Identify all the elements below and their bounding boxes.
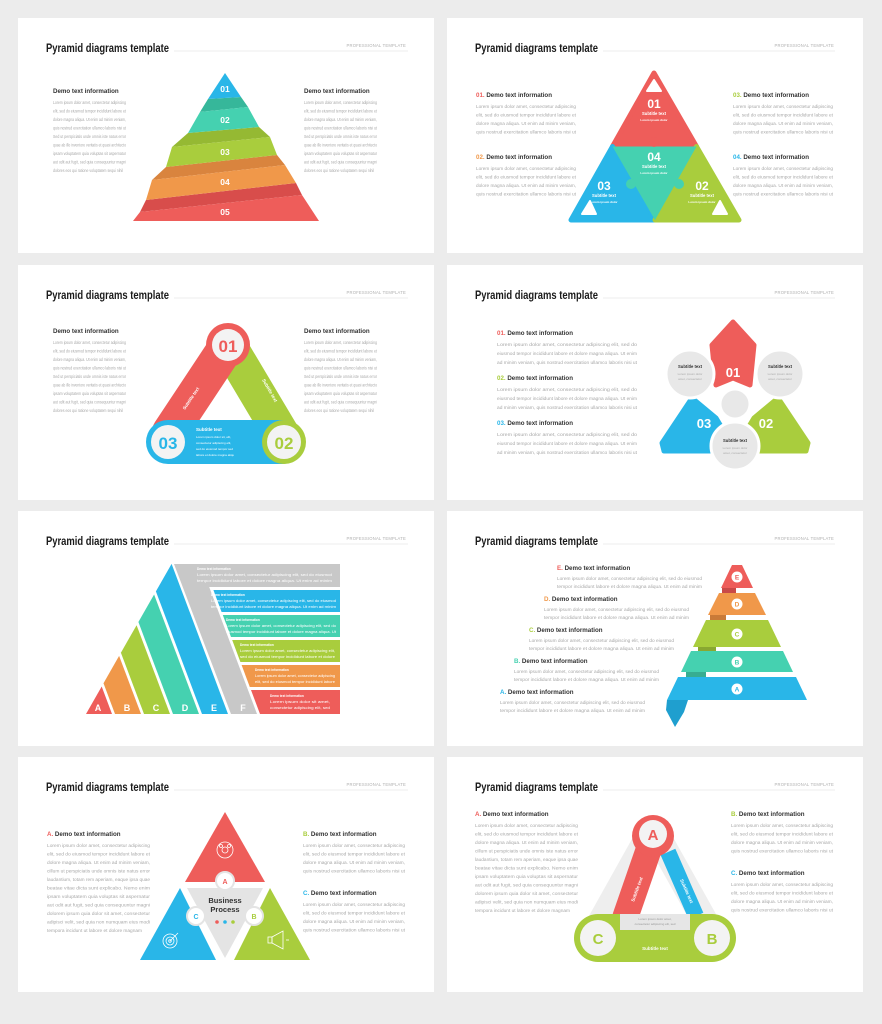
text block: A: aut odit aut fugit, sed quia consequuntur magni xyxy=(47,902,150,908)
text block: right: aut odit aut fugit, sed quia consequuntur magni xyxy=(304,400,377,404)
panel: slide 4 arrow flower xyxy=(447,265,863,500)
text block: left xyxy=(53,328,127,413)
text block: 03: dolore magna aliqua. Ut enim ad minim veniam, xyxy=(733,121,833,126)
chart: arrow flower: 01 xyxy=(726,365,740,380)
text block: D: D. Demo text information xyxy=(544,596,618,603)
chart: striped pyramid: Demo text information xyxy=(197,567,231,571)
chart: business process triangle: Process xyxy=(210,905,240,914)
chart: puzzle triangle: Subtitle text xyxy=(690,193,715,198)
chart: puzzle triangle: Lorem ipsum dolor xyxy=(640,171,668,175)
text block: B: dolore magna aliqua. Ut enim ad minim veniam, xyxy=(303,860,405,865)
text block: A: beatae vitae dicta sunt explicabo. Nemo enim xyxy=(475,866,578,870)
text block: E: tempor incididunt labore et dolore magna aliqua. Ut enim ad minim xyxy=(557,584,702,589)
text block: left: ipsam voluptatem quia voluptas sit aspernatur xyxy=(53,151,126,156)
chart: striped pyramid: B xyxy=(124,703,131,713)
text block: left: dolore magna aliqua. Ut enim ad minim veniam, xyxy=(53,117,126,122)
chart: arrow flower: amet, consectetur xyxy=(768,377,792,381)
text block: A: dolorem ipsum quia dolor sit amet, consectetur xyxy=(475,891,579,896)
title: slide 1: PROFESSIONAL TEMPLATE xyxy=(346,43,406,48)
chart: striped pyramid: Lorem ipsum dolor sit amet, xyxy=(270,700,330,704)
text block: right: dolore magna aliqua. Ut enim ad minim veniam, xyxy=(304,357,377,362)
text block: left: quae ab illo inventore veritatis et quasi architecto xyxy=(53,382,126,388)
text block: A: A. Demo text information xyxy=(500,689,574,696)
panel: slide 5 striped pyramid xyxy=(18,511,434,746)
chart: layered pyramid: D xyxy=(735,602,740,608)
text block: C: C. Demo text information xyxy=(731,870,805,877)
text block: B: quis nostrud exercitation ullamco laboris nisi ut xyxy=(303,868,406,874)
chart: ribbon triangle: Subtitle text xyxy=(182,386,201,411)
chart: arrow flower: Subtitle text xyxy=(723,438,748,443)
chart: ring triangle: Subtitle text xyxy=(642,946,668,951)
text block: 03: 03. Demo text information xyxy=(497,420,573,427)
text block: 04: quis nostrud exercitation ullamco laboris nisi ut xyxy=(733,192,834,196)
text block: right: aut odit aut fugit, sed quia consequuntur magni xyxy=(304,160,377,164)
title: slide 3: PROFESSIONAL TEMPLATE xyxy=(346,290,406,295)
text block: A: tempora incidunt ut labore et dolore magnam xyxy=(47,928,142,933)
text block: A: A. Demo text information xyxy=(475,811,549,818)
text block: A: tempora incidunt ut labore et dolore magnam xyxy=(475,908,570,913)
text block: B: B. Demo text information xyxy=(731,811,805,818)
chart: striped pyramid: sed do eiusmod tempor incididunt labore et dolore xyxy=(240,655,335,659)
text block: right: dolores eos qui ratione voluptatem sequi nihil xyxy=(304,408,374,413)
title: slide 5: PROFESSIONAL TEMPLATE xyxy=(346,536,406,541)
text block: 02: elit, sed do eiusmod tempor incididunt labore et xyxy=(476,174,577,180)
text block: left: ipsam voluptatem quia voluptas sit aspernatur xyxy=(53,391,126,396)
text block: 04: 04. Demo text information xyxy=(733,154,809,161)
text block: E xyxy=(557,565,703,589)
chart: striped pyramid: Lorem ipsum dolor amet, consectetur adipiscing elit, sed do eiusmod xyxy=(197,573,332,577)
text block: 02: ad minim veniam, quis nostrud exercitation ullamco laboris nisi ut xyxy=(497,405,638,410)
chart: arrow flower: amet, consectetur xyxy=(678,377,702,381)
text block: A: Lorem ipsum dolor amet, consectetur adipiscing elit, sed do eiusmod xyxy=(500,700,646,705)
chart: puzzle triangle xyxy=(571,73,739,220)
text block: B xyxy=(514,658,660,682)
text block: 02: 02. Demo text information xyxy=(476,154,552,161)
chart: striped pyramid xyxy=(86,564,340,714)
chart: ring triangle: Lorem ipsum dolor amet, xyxy=(638,917,672,921)
text block: right xyxy=(304,328,378,413)
text block: E: Lorem ipsum dolor amet, consectetur adipiscing elit, sed do eiusmod xyxy=(557,576,703,581)
text block: 04: dolore magna aliqua. Ut enim ad minim veniam, xyxy=(733,183,833,188)
text block: right: quis nostrud exercitation ullamco laboris nisi ut xyxy=(304,126,378,130)
text block: A: beatae vitae dicta sunt explicabo. Nemo enim xyxy=(47,886,150,890)
chart: ring triangle: C xyxy=(593,931,604,948)
chart: layered pyramid: A xyxy=(735,686,740,694)
text block: C: Lorem ipsum dolor amet, consectetur adipiscing xyxy=(303,902,406,907)
chart: ring triangle: Subtitle text xyxy=(679,878,694,904)
chart: puzzle triangle: Lorem ipsum dolor xyxy=(688,200,716,204)
text block: right: Lorem ipsum dolor amet, consectetur adipiscing xyxy=(304,100,377,105)
title: slide 1 xyxy=(46,43,408,55)
icon: target xyxy=(163,933,178,948)
chart: striped pyramid: Lorem ipsum dolor amet, consectetur adipiscing elit, sed do xyxy=(226,624,336,628)
text block: 01: eiusmod tempor incididunt labore et dolore magna aliqua. Ut enim xyxy=(497,351,637,356)
chart: arrow flower: Lorem ipsum dolor xyxy=(723,446,747,450)
text block: left: Sed ut perspiciatis unde omnis iste natus error xyxy=(53,374,126,379)
title: slide 5 xyxy=(46,536,408,548)
text block: right: dolore magna aliqua. Ut enim ad minim veniam, xyxy=(304,117,377,122)
chart: arrow flower: 02 xyxy=(759,416,773,431)
chart: ring triangle: Subtitle text xyxy=(630,876,644,902)
chart: ring triangle: B xyxy=(707,931,718,948)
chart: arrow flower xyxy=(662,322,808,470)
chart: ring triangle: consectetur adipiscing elit, sed xyxy=(635,922,676,926)
text block: A: A. Demo text information xyxy=(47,831,121,838)
chart: striped pyramid: A xyxy=(95,703,102,713)
title: slide 8: PROFESSIONAL TEMPLATE xyxy=(774,782,834,787)
chart: arrow flower: amet, consectetur xyxy=(723,451,747,455)
text block: left: quis nostrud exercitation ullamco laboris nisi ut xyxy=(53,126,127,130)
chart: business process triangle: C xyxy=(193,914,199,921)
title: slide 8: Pyramid diagrams template xyxy=(475,782,598,794)
text block: A: elit, sed do eiusmod tempor incididunt labore et xyxy=(47,852,151,856)
chart: puzzle triangle: Subtitle text xyxy=(592,193,617,198)
text block: right: ipsam voluptatem quia voluptas sit aspernatur xyxy=(304,151,377,156)
text block: C: elit, sed do eiusmod tempor incididunt labore et xyxy=(731,890,834,896)
chart: ribbon triangle: labore et dolore magna aliqu xyxy=(196,453,234,457)
text block: A: dolorem ipsum quia dolor sit amet, consectetur xyxy=(47,911,151,916)
chart: spiral pyramid: 02 xyxy=(220,115,230,125)
text block: 03: Lorem ipsum dolor amet, consectetur adipiscing elit, sed do xyxy=(497,432,638,437)
text block: 01: Lorem ipsum dolor amet, consectetur adipiscing elit, sed do xyxy=(497,342,638,347)
chart: layered pyramid: E xyxy=(735,574,740,582)
text block: 04: Lorem ipsum dolor amet, consectetur adipiscing xyxy=(733,166,834,171)
chart: striped pyramid: C xyxy=(153,703,160,713)
text block: B: elit, sed do eiusmod tempor incididunt labore et xyxy=(731,832,834,836)
text block: 03: Lorem ipsum dolor amet, consectetur adipiscing xyxy=(733,104,834,109)
text block: A: cillum ut perspiciatis unde omnis iste natus error xyxy=(475,848,579,854)
chart: ribbon triangle: 01 xyxy=(219,337,237,356)
text block: right: ipsam voluptatem quia voluptas sit aspernatur xyxy=(304,391,377,396)
chart: striped pyramid: F xyxy=(240,703,246,713)
panel: slide 6 layered pyramid xyxy=(447,511,863,746)
title: slide 4 xyxy=(475,290,835,302)
chart: puzzle triangle: 01 xyxy=(647,97,661,111)
text block: C: dolore magna aliqua. Ut enim ad minim veniam, xyxy=(731,899,833,904)
text block: 02: 02. Demo text information xyxy=(497,375,573,382)
text block: left: Lorem ipsum dolor amet, consectetur adipiscing xyxy=(53,340,126,345)
chart: striped pyramid: tempor incididunt labore et dolore magna aliqua. Ut enim ad minim xyxy=(211,605,336,609)
chart: layered pyramid: C xyxy=(735,632,740,638)
text block: A: laudantium, totam rem aperiam, eaque ipsa quae xyxy=(47,877,151,882)
title: slide 7: PROFESSIONAL TEMPLATE xyxy=(346,782,406,787)
text block: A: laudantium, totam rem aperiam, eaque ipsa quae xyxy=(475,857,579,862)
panel: slide 8 ring triangle xyxy=(447,757,863,992)
chart: business process triangle: B xyxy=(251,914,257,921)
chart: ribbon triangle: 02 xyxy=(275,434,293,453)
text block: A: cillum ut perspiciatis unde omnis iste natus error xyxy=(47,868,151,874)
text block: D: Lorem ipsum dolor amet, consectetur adipiscing elit, sed do eiusmod xyxy=(544,607,690,612)
chart: striped pyramid: tempor incididunt labore et dolore magna aliqua. Ut enim ad minim xyxy=(197,579,332,583)
text block: right: Demo text information xyxy=(304,328,370,335)
text block: right: quis nostrud exercitation ullamco laboris nisi ut xyxy=(304,366,378,370)
text block: C: C. Demo text information xyxy=(303,890,377,897)
text block: B xyxy=(731,811,834,854)
panel: slide 3 ribbon triangle xyxy=(18,265,434,500)
text block: A: adipisci velit, sed quia non numquam eius modi xyxy=(47,920,150,924)
chart: ribbon triangle: consectetur adipiscing elit, xyxy=(196,441,231,445)
text block: E: E. Demo text information xyxy=(557,565,630,572)
text block: B: Lorem ipsum dolor amet, consectetur adipiscing elit, sed do eiusmod xyxy=(514,669,660,674)
title: slide 7: Pyramid diagrams template xyxy=(46,782,169,794)
chart: layered pyramid: B xyxy=(735,660,740,666)
chart: ribbon triangle: Subtitle text xyxy=(261,378,279,403)
text block: left: Demo text information xyxy=(53,328,119,335)
text block: left: aut odit aut fugit, sed quia consequuntur magni xyxy=(53,400,126,404)
text block: B: Lorem ipsum dolor amet, consectetur adipiscing xyxy=(731,823,834,828)
chart: striped pyramid: consectetur adipiscing elit, sed xyxy=(270,706,330,710)
text block: 03: elit, sed do eiusmod tempor incididunt labore et xyxy=(733,112,834,118)
text block: C: elit, sed do eiusmod tempor incididunt labore et xyxy=(303,910,406,916)
text block: right: Demo text information xyxy=(304,88,370,95)
text block: A: elit, sed do eiusmod tempor incididunt labore et xyxy=(475,832,579,836)
text block: A xyxy=(500,689,646,713)
text block: left: dolores eos qui ratione voluptatem sequi nihil xyxy=(53,168,123,173)
chart: spiral pyramid xyxy=(133,73,319,221)
chart: striped pyramid: eiusmod tempor incididunt labore et dolore magna aliqua. Ut xyxy=(226,630,336,634)
chart: puzzle triangle: Lorem ipsum dolor xyxy=(590,200,618,204)
text block: C: quis nostrud exercitation ullamco laboris nisi ut xyxy=(731,908,834,912)
text block: C: Lorem ipsum dolor amet, consectetur adipiscing elit, sed do eiusmod xyxy=(529,638,675,643)
text block: 02 xyxy=(476,154,577,196)
chart: arrow flower: Subtitle text xyxy=(768,364,793,369)
text block: left: quis nostrud exercitation ullamco laboris nisi ut xyxy=(53,366,127,370)
text block: A: Lorem ipsum dolor amet, consectetur adipiscing xyxy=(47,843,151,848)
text block: right xyxy=(304,88,378,173)
chart: spiral pyramid: 04 xyxy=(220,177,230,187)
chart: striped pyramid: Lorem ipsum dolor amet, consectetur adipiscing elit, sed do eiusmod xyxy=(211,599,336,603)
title: slide 3: Pyramid diagrams template xyxy=(46,290,169,302)
text block: 02: quis nostrud exercitation ullamco laboris nisi ut xyxy=(476,192,577,196)
title: slide 2: PROFESSIONAL TEMPLATE xyxy=(774,43,834,48)
text block: A: aut odit aut fugit, sed quia consequuntur magni xyxy=(475,882,578,888)
text block: C xyxy=(731,870,834,912)
text block: C xyxy=(529,627,675,651)
text block: B xyxy=(303,831,406,874)
text block: 03: eiusmod tempor incididunt labore et dolore magna aliqua. Ut enim xyxy=(497,441,637,446)
text block: A xyxy=(475,811,579,913)
chart: puzzle triangle: Subtitle text xyxy=(642,164,667,169)
chart: spiral pyramid: 01 xyxy=(220,84,230,94)
title: slide 8 xyxy=(475,782,835,794)
text block: right: Sed ut perspiciatis unde omnis iste natus error xyxy=(304,134,377,139)
text block: left: aut odit aut fugit, sed quia consequuntur magni xyxy=(53,160,126,164)
chart: puzzle triangle: 02 xyxy=(695,179,709,193)
chart: puzzle triangle: 03 xyxy=(597,179,611,193)
text block: A: ipsam voluptatem quia voluptas sit aspernatur xyxy=(47,894,151,899)
text block: 03: quis nostrud exercitation ullamco laboris nisi ut xyxy=(733,130,834,134)
chart: puzzle triangle: Subtitle text xyxy=(642,111,667,116)
text block: 02: dolore magna aliqua. Ut enim ad minim veniam, xyxy=(476,183,576,188)
text block: C: Lorem ipsum dolor amet, consectetur adipiscing xyxy=(731,882,834,887)
text block: A: dolore magna aliqua. Ut enim ad minim veniam, xyxy=(47,860,150,865)
chart: ribbon triangle: 03 xyxy=(159,434,177,453)
chart: striped pyramid: Lorem ipsum dolor amet, consectetur adipiscing xyxy=(255,674,335,678)
text block: C: tempor incididunt labore et dolore magna aliqua. Ut enim ad minim xyxy=(529,646,674,651)
text block: 01: quis nostrud exercitation ullamco laboris nisi ut xyxy=(476,130,577,134)
chart: ribbon triangle: sed do eiusmod tempor sed xyxy=(196,447,233,451)
text block: left: quae ab illo inventore veritatis et quasi architecto xyxy=(53,142,126,148)
text block: 01 xyxy=(476,92,577,134)
chart: spiral pyramid: 05 xyxy=(220,207,230,217)
title: slide 5: Pyramid diagrams template xyxy=(46,536,169,548)
chart: arrow flower: Lorem ipsum dolor xyxy=(768,372,792,376)
text block: 01: ad minim veniam, quis nostrud exercitation ullamco laboris nisi ut xyxy=(497,360,638,365)
text block: left: dolore magna aliqua. Ut enim ad minim veniam, xyxy=(53,357,126,362)
text block: 02: eiusmod tempor incididunt labore et dolore magna aliqua. Ut enim xyxy=(497,396,637,401)
text block: 04 xyxy=(733,154,834,196)
text block: B: dolore magna aliqua. Ut enim ad minim veniam, xyxy=(731,840,833,845)
text block: A xyxy=(47,831,151,933)
text block: left: dolores eos qui ratione voluptatem sequi nihil xyxy=(53,408,123,413)
text block: A: Lorem ipsum dolor amet, consectetur adipiscing xyxy=(475,823,579,828)
chart: striped pyramid: E xyxy=(211,703,217,713)
text block: B: elit, sed do eiusmod tempor incididunt labore et xyxy=(303,852,406,856)
title: slide 2: Pyramid diagrams template xyxy=(475,43,598,55)
text block: left: Sed ut perspiciatis unde omnis iste natus error xyxy=(53,134,126,139)
text block: 01: 01. Demo text information xyxy=(497,330,573,337)
title: slide 1: Pyramid diagrams template xyxy=(46,43,169,55)
text block: B: Lorem ipsum dolor amet, consectetur adipiscing xyxy=(303,843,406,848)
chart: business process triangle xyxy=(140,812,310,960)
text block: C xyxy=(303,890,406,932)
chart: ring triangle xyxy=(580,815,730,956)
text block: B: quis nostrud exercitation ullamco laboris nisi ut xyxy=(731,848,834,854)
text block: C: quis nostrud exercitation ullamco laboris nisi ut xyxy=(303,928,406,932)
chart: ring triangle: A xyxy=(648,827,659,844)
text block: C: dolore magna aliqua. Ut enim ad minim veniam, xyxy=(303,919,405,924)
text block: 04: elit, sed do eiusmod tempor incididunt labore et xyxy=(733,174,834,180)
title: slide 7 xyxy=(46,782,408,794)
chart: arrow flower: 03 xyxy=(697,416,711,431)
chart: ribbon triangle xyxy=(151,323,306,464)
text block: right: dolores eos qui ratione voluptatem sequi nihil xyxy=(304,168,374,173)
title: slide 3 xyxy=(46,290,408,302)
text block: A: adipisci velit, sed quia non numquam eius modi xyxy=(475,900,578,904)
text block: left: Demo text information xyxy=(53,88,119,95)
text block: D: tempor incididunt labore et dolore magna aliqua. Ut enim ad minim xyxy=(544,615,689,620)
text block: left xyxy=(53,88,127,173)
chart: striped pyramid: Demo text information xyxy=(270,694,304,698)
title: slide 4: Pyramid diagrams template xyxy=(475,290,598,302)
text block: B: tempor incididunt labore et dolore magna aliqua. Ut enim ad minim xyxy=(514,677,659,682)
text block: A: dolore magna aliqua. Ut enim ad minim veniam, xyxy=(475,840,578,845)
chart: striped pyramid: Demo text information xyxy=(226,618,260,622)
chart: puzzle triangle: Lorem ipsum dolor xyxy=(640,118,668,122)
text block: 02: Lorem ipsum dolor amet, consectetur adipiscing elit, sed do xyxy=(497,387,638,392)
text block: left: elit, sed do eiusmod tempor incididunt labore et xyxy=(53,348,127,354)
chart: striped pyramid: Demo text information xyxy=(255,668,289,672)
text block: 01: 01. Demo text information xyxy=(476,92,552,99)
text block: right: Sed ut perspiciatis unde omnis iste natus error xyxy=(304,374,377,379)
chart: business process triangle: Business xyxy=(208,896,242,905)
panel: slide 7 business process xyxy=(18,757,434,992)
text block: right: elit, sed do eiusmod tempor incididunt labore et xyxy=(304,108,378,114)
chart: striped pyramid: Lorem ipsum dolor amet, consectetur adipiscing elit, xyxy=(240,649,335,653)
icon: megaphone xyxy=(268,931,289,949)
text block: right: Lorem ipsum dolor amet, consectetur adipiscing xyxy=(304,340,377,345)
text block: A: ipsam voluptatem quia voluptas sit aspernatur xyxy=(475,874,579,879)
chart: ribbon triangle: Lorem ipsum dolor sit, elit, xyxy=(196,435,231,439)
title: slide 6: Pyramid diagrams template xyxy=(475,536,598,548)
text block: right: quae ab illo inventore veritatis et quasi architecto xyxy=(304,382,377,388)
text block: 01 xyxy=(497,330,638,365)
text block: 02: Lorem ipsum dolor amet, consectetur adipiscing xyxy=(476,166,577,171)
text block: 03: ad minim veniam, quis nostrud exercitation ullamco laboris nisi ut xyxy=(497,450,638,455)
text block: 01: elit, sed do eiusmod tempor incididunt labore et xyxy=(476,112,577,118)
text block: C: C. Demo text information xyxy=(529,627,603,634)
chart: layered pyramid xyxy=(666,565,807,727)
text block: B: B. Demo text information xyxy=(303,831,377,838)
chart: striped pyramid: elit, sed do eiusmod tempor incididunt labore xyxy=(255,680,335,684)
chart: striped pyramid: Demo text information xyxy=(211,593,245,597)
chart: puzzle triangle: 04 xyxy=(647,150,661,164)
chart: ribbon triangle: Subtitle text xyxy=(196,427,222,432)
text block: 03: 03. Demo text information xyxy=(733,92,809,99)
text block: right: quae ab illo inventore veritatis et quasi architecto xyxy=(304,142,377,148)
text block: 02 xyxy=(497,375,638,410)
text block: left: Lorem ipsum dolor amet, consectetur adipiscing xyxy=(53,100,126,105)
panel: slide 1 spiral pyramid xyxy=(18,18,434,253)
text block: right: elit, sed do eiusmod tempor incididunt labore et xyxy=(304,348,378,354)
chart: arrow flower: Lorem ipsum dolor xyxy=(678,372,702,376)
title: slide 6: PROFESSIONAL TEMPLATE xyxy=(774,536,834,541)
text block: D xyxy=(544,596,690,620)
chart: business process triangle: A xyxy=(222,879,228,886)
title: slide 2 xyxy=(475,43,835,55)
text block: A: tempor incididunt labore et dolore magna aliqua. Ut enim ad minim xyxy=(500,708,645,713)
title: slide 4: PROFESSIONAL TEMPLATE xyxy=(774,290,834,295)
chart: spiral pyramid: 03 xyxy=(220,147,230,157)
text block: 03 xyxy=(497,420,638,455)
text block: 03 xyxy=(733,92,834,134)
icon: team xyxy=(217,842,233,858)
text block: 01: Lorem ipsum dolor amet, consectetur adipiscing xyxy=(476,104,577,109)
chart: striped pyramid: D xyxy=(182,703,189,713)
text block: B: B. Demo text information xyxy=(514,658,588,665)
chart: striped pyramid: Demo text information xyxy=(240,643,274,647)
panel: slide 2 puzzle triangle xyxy=(447,18,863,253)
text block: left: elit, sed do eiusmod tempor incididunt labore et xyxy=(53,108,127,114)
chart: arrow flower: Subtitle text xyxy=(678,364,703,369)
text block: 01: dolore magna aliqua. Ut enim ad minim veniam, xyxy=(476,121,576,126)
title: slide 6 xyxy=(475,536,835,548)
